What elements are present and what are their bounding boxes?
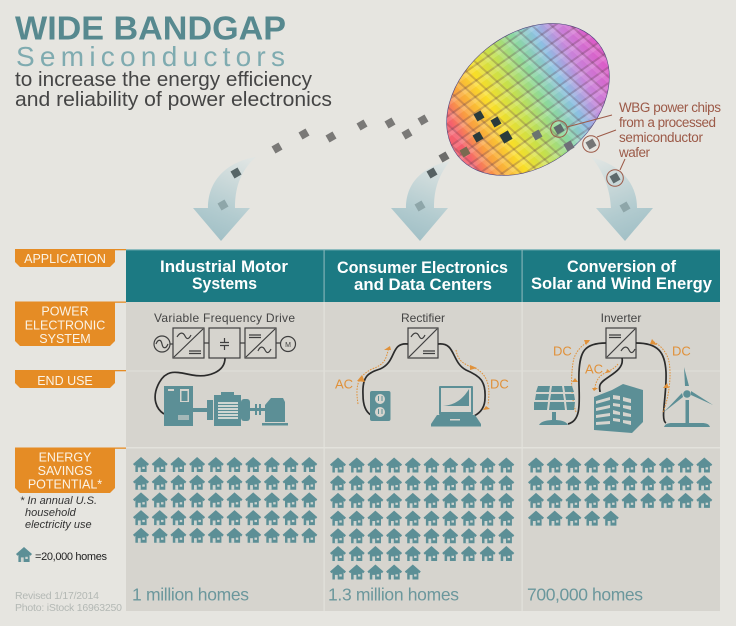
value: 700,000 homes: 700,000 homes [527,584,643,604]
value: 1.3 million homes: 1.3 million homes [328,584,459,604]
header: consumer electronics: Consumer Electronics [337,259,508,277]
legend: house equals 20,000 homes: =20,000 homes [35,551,108,563]
consumer electronics: rectifier diagram [401,311,445,358]
cables with DC/AC flow: inverter: DC [672,344,691,358]
header: industrial motor systems: Systems [192,275,257,293]
footnote: electricity use [25,519,92,531]
houses: solar and wind [528,458,712,526]
header: industrial motor systems: Industrial Motor [160,258,289,276]
title [15,10,332,111]
footnote [20,495,97,531]
footnote: * In annual U.S. [20,495,97,507]
title: and reliability of power electronics [15,88,332,111]
icon: wall outlet [370,391,390,421]
label: power electronic system [15,302,126,346]
cable with AC/DC flow: rectifier [335,344,509,416]
title: to increase the energy efficiency [15,68,313,91]
label: end use: END USE [37,374,93,388]
callout: WBG power chips: from a processed [619,115,716,130]
falling chips [218,114,630,212]
header: conversion of solar and wind [126,249,720,302]
callout: WBG power chips [551,100,721,186]
table background panels [126,302,720,611]
wafer [446,23,610,176]
header: consumer electronics [324,250,522,302]
cable with AC/DC flow: rectifier: DC [490,376,509,392]
credits [15,590,122,614]
solar and wind: inverter diagram [601,311,641,358]
cables with DC/AC flow: inverter [553,339,691,424]
header: consumer electronics: and Data Centers [354,276,492,294]
label: application: APPLICATION [24,252,106,266]
label: power electronic system: ELECTRONIC [25,318,105,332]
credits: Photo: iStock 16963250 [15,602,122,614]
header: industrial motor systems [126,250,324,302]
industrial motor: variable frequency drive diagram [154,311,296,358]
header: conversion of solar and wind: Solar and Wind Energy [531,275,713,293]
label: energy savings potential [15,448,126,493]
label: energy savings potential: ENERGY [39,450,92,464]
arrow: to consumer electronics [391,161,450,241]
label: end use [15,370,126,388]
industrial motor: variable frequency drive diagram: M [285,342,291,349]
consumer electronics: rectifier diagram: Rectifier [401,311,445,325]
legend: house equals 20,000 homes [16,547,108,563]
icon: motor system [164,386,288,426]
value: 1 million homes: 1 million homes [132,584,249,604]
title: WIDE BANDGAP [15,10,286,46]
solar and wind: inverter diagram: Inverter [601,311,641,325]
title: Semiconductors [16,41,285,72]
icon: wind turbine [664,367,713,427]
dark chip sites on wafer [472,110,513,144]
credits: Revised 1/17/2014 [15,590,99,602]
arrow: to solar and wind [591,157,653,241]
header: conversion of solar and wind: Conversion of [567,258,676,276]
cables with DC/AC flow: inverter: AC [585,362,603,376]
cable: drive to cabinet [155,358,225,414]
icon: solar panel [534,386,575,425]
label: power electronic system: POWER [41,304,89,318]
label: energy savings potential: SAVINGS [38,464,92,478]
industrial motor: variable frequency drive diagram: Variable Frequency Drive [154,311,295,325]
houses: consumer electronics [330,458,514,580]
callout: WBG power chips: WBG power chips [619,100,721,115]
icon: office building [594,384,643,433]
cables with DC/AC flow: inverter: DC [553,344,572,358]
label: energy savings potential: POTENTIAL* [28,478,102,492]
cable with AC/DC flow: rectifier: AC [335,376,353,392]
label: application [15,249,126,267]
label: power electronic system: SYSTEM [39,332,91,346]
callout: WBG power chips: semiconductor [619,130,704,145]
footnote: household [25,507,77,519]
houses: industrial motor systems [133,457,317,543]
arrow: to industrial motor systems [193,157,256,241]
callout: WBG power chips: wafer [618,145,650,160]
icon: laptop [431,386,481,426]
